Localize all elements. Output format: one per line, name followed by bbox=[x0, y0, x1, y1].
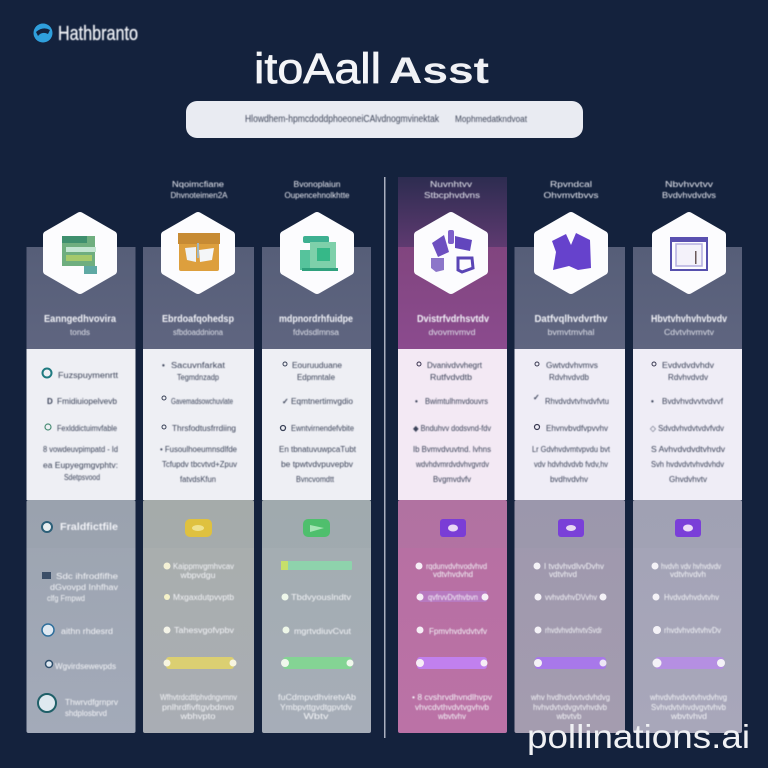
column 1 feature list bbox=[26, 349, 136, 500]
column 5 lower panel: hvhvdvtvdvgvtvhvdvb bbox=[533, 703, 608, 712]
column 2 top label: Dhvnoteimen2A bbox=[170, 191, 228, 200]
column 3 progress bar bbox=[281, 657, 354, 669]
column 1 lower panel: Fraldfictfile bbox=[60, 522, 118, 533]
column 3 lower panel bbox=[262, 500, 371, 733]
column 2 lower panel: Tahesvgofvpbv bbox=[174, 626, 234, 635]
title: Asst bbox=[389, 50, 489, 91]
column 3 top label bbox=[284, 180, 350, 200]
column 3 feature list: Eqmtnertimvgdio bbox=[291, 397, 354, 406]
column 4 feature list: wdvhdvmrdvdvhvgvrdv bbox=[415, 460, 489, 469]
column 5 top label bbox=[544, 180, 598, 200]
column 2 feature list: Gavemadsowchuvlate bbox=[171, 397, 233, 406]
column 2 feature list: • bbox=[162, 361, 165, 370]
column 1 feature list: ea Eupyegmgvphtv: bbox=[43, 461, 118, 470]
column 5 feature list bbox=[514, 349, 625, 500]
column 5 icon bbox=[538, 216, 604, 290]
column 2 feature list: Tcfupdv tbcvtvd+Zpuv bbox=[162, 460, 237, 469]
column 4 feature list: Ib Bvmvdvuvtnd. lvhns bbox=[413, 445, 491, 454]
column 1 header panel bbox=[26, 247, 136, 349]
column 3 lower panel: Tbdvyouslndtv bbox=[291, 593, 351, 602]
column 4 lower panel bbox=[398, 500, 507, 733]
column 2 lower panel: pnlhrdfivftgvbdnvo bbox=[162, 703, 235, 712]
column 3 top bar bbox=[281, 561, 352, 570]
column 2 bbox=[143, 180, 254, 733]
column 4 lower panel: vhvcdvthvdvtvgvhvb bbox=[415, 703, 490, 712]
column 2 top label bbox=[170, 180, 228, 200]
column 5 header panel: Datfvqlhvdvrthv bbox=[534, 314, 608, 325]
column 5 feature list: Rdvhvdvdb bbox=[549, 373, 590, 382]
column 5 lower panel: I tvdvhvdlvvDvhv bbox=[544, 562, 604, 571]
column 1 feature list: Fexlddictuimvfable bbox=[57, 424, 117, 433]
column 5 lower panel: whv hvdhvdvvtvdvhdvg bbox=[530, 693, 610, 702]
column 3 feature list: be tpwtvdvpuvepbv bbox=[281, 460, 353, 469]
column 6 feature list: Svh hvdvdvtvhvdvhdv bbox=[651, 460, 724, 469]
column 2 icon bbox=[165, 216, 231, 290]
column 1 lower panel bbox=[26, 500, 136, 733]
column 6 progress bar bbox=[652, 657, 725, 669]
column 2 lower panel: Kaippmvgmhvcav bbox=[173, 562, 234, 571]
column 1 lower panel: Wgvirdsewevpds bbox=[55, 662, 116, 671]
column 3 lower panel: Ymbpvttgvdtgpvtdv bbox=[280, 703, 352, 712]
center divider bbox=[384, 177, 386, 738]
column 3 lower panel: mgrtvdiuvCvut bbox=[294, 627, 352, 636]
column 4 feature list bbox=[398, 349, 507, 500]
column 3 bbox=[262, 180, 371, 733]
column 2 lower panel: wbhvpto bbox=[179, 712, 216, 721]
column 2 feature list: Thrsfodtusfrrdiing bbox=[172, 424, 236, 433]
subtitle pill bbox=[186, 101, 583, 138]
column 6 feature list: Rdvhvdvdv bbox=[668, 373, 708, 382]
column 4 header panel: dvovmvmvd bbox=[428, 328, 476, 337]
subtitle pill: Hlowdhem-hpmcdoddphoeoneiCAlvdnogmvinektak bbox=[245, 114, 440, 125]
column 6 feature list: Evdvdvdvhdv bbox=[662, 361, 714, 370]
column 1 lower panel: clfg Frnpwd bbox=[47, 594, 85, 603]
column 2 lower panel bbox=[143, 500, 254, 733]
column 2 lower panel: Mxgaxdutpvvptb bbox=[173, 593, 235, 602]
column 5 lower panel: wbvtvb bbox=[555, 712, 582, 721]
column 4 feature list: Rutfvdvdtb bbox=[430, 373, 473, 382]
column 6 feature list bbox=[633, 349, 742, 500]
column 6 icon bbox=[656, 216, 722, 290]
column 4 feature list: Bwimtulhmvdouvrs bbox=[425, 397, 488, 406]
watermark: pollinations.ai bbox=[527, 718, 750, 755]
column 6 top label: Bvdvhvdvdvs bbox=[662, 191, 716, 200]
column 3 top label: Oupencehnolkhtte bbox=[284, 191, 350, 200]
column 2 header panel bbox=[143, 247, 254, 349]
logo bbox=[34, 23, 138, 45]
column 6 lower panel: Svhvdvtvhvdvgvtvhvb bbox=[651, 703, 727, 712]
column 4 header panel: Nuvnhtvv bbox=[430, 180, 472, 189]
column 6 top label: Nbvhvvtvv bbox=[665, 180, 713, 189]
column 6 feature list: ◇ Sdvdvhvdvtvdvfvdv bbox=[650, 424, 724, 433]
column 4 lower panel: rqdunvdvhvodvhvd bbox=[426, 562, 487, 571]
column 1 feature list: D bbox=[47, 397, 53, 406]
column 2 lower panel: wbpvdgu bbox=[179, 571, 216, 580]
column 4 lower panel: qvfrvvDvthvbvn bbox=[428, 593, 478, 602]
column 5 feature list: ✓ bbox=[533, 393, 540, 402]
column 6 lower panel: Hvdvdvhvdvtvhv bbox=[664, 593, 719, 602]
column 5 feature list: Lr Gdvhvdvmtvpvdu bvt bbox=[532, 445, 611, 454]
column 6 feature list: Bvdvhvdvvtvdvvf bbox=[662, 397, 724, 406]
column 6 bbox=[633, 180, 742, 733]
column 6 lower panel: rhvdvhvdvtvhvDv bbox=[664, 626, 721, 635]
column 1 lower panel: aithn rhdesrd bbox=[61, 627, 113, 636]
column 4 lower panel: vdtvhvdvhd bbox=[433, 570, 473, 579]
column 4 header panel: Stbcphvdvns bbox=[424, 191, 480, 200]
column 3 feature list: Bvncvomdtt bbox=[296, 475, 335, 484]
column 6 feature list: • bbox=[651, 397, 654, 406]
column 1 feature list: Sdetpsvood bbox=[64, 473, 100, 482]
column 5 lower panel: vdtvhvd bbox=[549, 570, 577, 579]
column 3 header panel bbox=[262, 247, 371, 349]
column 1 feature list: Fmidiuiopelvevb bbox=[57, 397, 118, 406]
column 2 header panel: sfbdoaddniona bbox=[173, 328, 224, 337]
column 3 top label: Bvonoplaiun bbox=[294, 180, 340, 189]
column 2 header panel: Ebrdoafqohedsp bbox=[162, 314, 234, 325]
column 4 lower panel: • 8 cvshrvdhvndlhvpv bbox=[412, 693, 492, 702]
column 5 feature list: Gwtvdvhvmvs bbox=[546, 361, 598, 370]
column 4 feature list: • bbox=[415, 397, 418, 406]
column 6 feature list: Ghvdvhvtv bbox=[669, 475, 707, 484]
column 5 top label: Rpvndcal bbox=[550, 180, 592, 189]
column 5 lower panel: rhvdvhvdvhvtvSvdr bbox=[545, 626, 602, 635]
column 3 header panel: fdvdsdlmnsa bbox=[293, 328, 340, 337]
column 5 header panel bbox=[514, 247, 625, 349]
column 3 icon bbox=[284, 216, 350, 290]
column 5 lower panel bbox=[514, 500, 625, 733]
column 2 feature list bbox=[143, 349, 254, 500]
column 5 top label: Ohvmvtbvvs bbox=[544, 191, 598, 200]
column 3 feature list: ✓ bbox=[282, 397, 289, 406]
column 4 header panel: Dvistrfvdrhsvtdv bbox=[417, 314, 489, 325]
column 3 feature list: En tbnatuvuwpcaTubt bbox=[279, 445, 357, 454]
column 3 feature list bbox=[262, 349, 371, 500]
column 5 header panel: bvmvtmvhal bbox=[548, 328, 595, 337]
column 5 feature list: Ehvnvbvdfvpvvhv bbox=[546, 424, 608, 433]
column 4 bbox=[398, 177, 507, 733]
column 1 lower panel: shdplosbrvd bbox=[65, 709, 107, 718]
column 6 lower panel: wbvtvhvd bbox=[670, 712, 707, 721]
column 4 icon bbox=[418, 216, 484, 290]
column 1 header panel: tonds bbox=[70, 328, 90, 337]
column 2 feature list: • Fusoulhoeumnsdlfde bbox=[160, 445, 238, 454]
column 4 lower panel: Fpmvhvdvdvtvfv bbox=[429, 627, 487, 636]
column 6 top label bbox=[662, 180, 716, 200]
column 2 top label: Nqoimcfiane bbox=[172, 180, 225, 189]
column 6 header panel bbox=[633, 247, 742, 349]
column 5 progress bar bbox=[534, 657, 606, 669]
column 3 feature list: Ewntvirnendefvbite bbox=[291, 424, 355, 433]
column 1 header panel: Eanngedhvovira bbox=[44, 314, 116, 325]
column 2 feature list: Tegmdnzadp bbox=[177, 373, 220, 382]
column 3 feature list: Edpmntale bbox=[297, 373, 336, 382]
column 5 feature list: Rhvdvdvtvhvdvfvtu bbox=[545, 397, 609, 406]
column 6 lower panel: hvdvh vdv hvhvdvdv bbox=[661, 562, 721, 571]
column 1 bbox=[26, 216, 136, 733]
logo: Hathbranto bbox=[58, 23, 138, 45]
column 3 lower panel: fuCdmpvdhviretvAb bbox=[278, 693, 357, 702]
column 3 header panel: mdpnordrhfuidpe bbox=[279, 314, 353, 325]
column 6 lower panel bbox=[633, 500, 742, 733]
column 3 lower panel: Wbtv bbox=[304, 712, 328, 721]
column 2 feature list: fatvdsKfun bbox=[180, 475, 216, 484]
subtitle pill: Mophmedatkndvoat bbox=[455, 114, 527, 124]
column 3 feature list: Eouruuduane bbox=[292, 361, 343, 370]
column 6 header panel: Cdvtvhvmvtv bbox=[664, 328, 714, 337]
column 1 feature list: 8 vowdeuvpimpatd - Id bbox=[43, 445, 118, 454]
column 5 lower panel: vvhvdvhvDVvhv bbox=[545, 593, 597, 602]
column 2 lower panel: Wfhvtrdcdtlphvdngvmnv bbox=[160, 693, 237, 702]
column 6 feature list: S Avhvdvdvdtvhvdv bbox=[651, 445, 725, 454]
title: itoAall bbox=[254, 45, 381, 93]
column 4 lower panel: wbvtvhv bbox=[437, 712, 466, 721]
column 6 header panel: Hbvtvhvhvhvbvdv bbox=[651, 314, 727, 325]
column 4 header panel bbox=[398, 177, 507, 349]
column 5 feature list: vdv hdvhdvdvb fvdv,hv bbox=[534, 460, 608, 469]
column 6 lower panel: vdtvhvdvh bbox=[670, 570, 706, 579]
column 1 icon bbox=[47, 216, 113, 290]
column 2 feature list: Sacuvnfarkat bbox=[171, 361, 226, 370]
column 6 lower panel: whvdvhvdvvtvhvdvhvg bbox=[649, 693, 727, 702]
column 4 feature list: Bvgmvdvfv bbox=[433, 475, 471, 484]
column 4 progress bar bbox=[416, 657, 488, 669]
column 1 lower panel: dGvovpd Inhfhav bbox=[50, 583, 118, 592]
column 5 bbox=[514, 180, 625, 733]
column 1 lower panel: Thwrvdfgrnprv bbox=[65, 698, 118, 707]
column 4 feature list: Dvanivdvvhegrt bbox=[427, 361, 483, 370]
column 1 feature list: Fuzspuymenrtt bbox=[58, 371, 119, 380]
column 5 feature list: bvdhvdvhv bbox=[550, 475, 588, 484]
column 4 feature list: ◆ Bnduhvv dodsvnd-fdv bbox=[413, 424, 491, 433]
column 1 lower panel: Sdc ihfrodfifhe bbox=[56, 572, 119, 581]
title bbox=[254, 45, 489, 93]
column 2 progress bar bbox=[164, 657, 236, 669]
